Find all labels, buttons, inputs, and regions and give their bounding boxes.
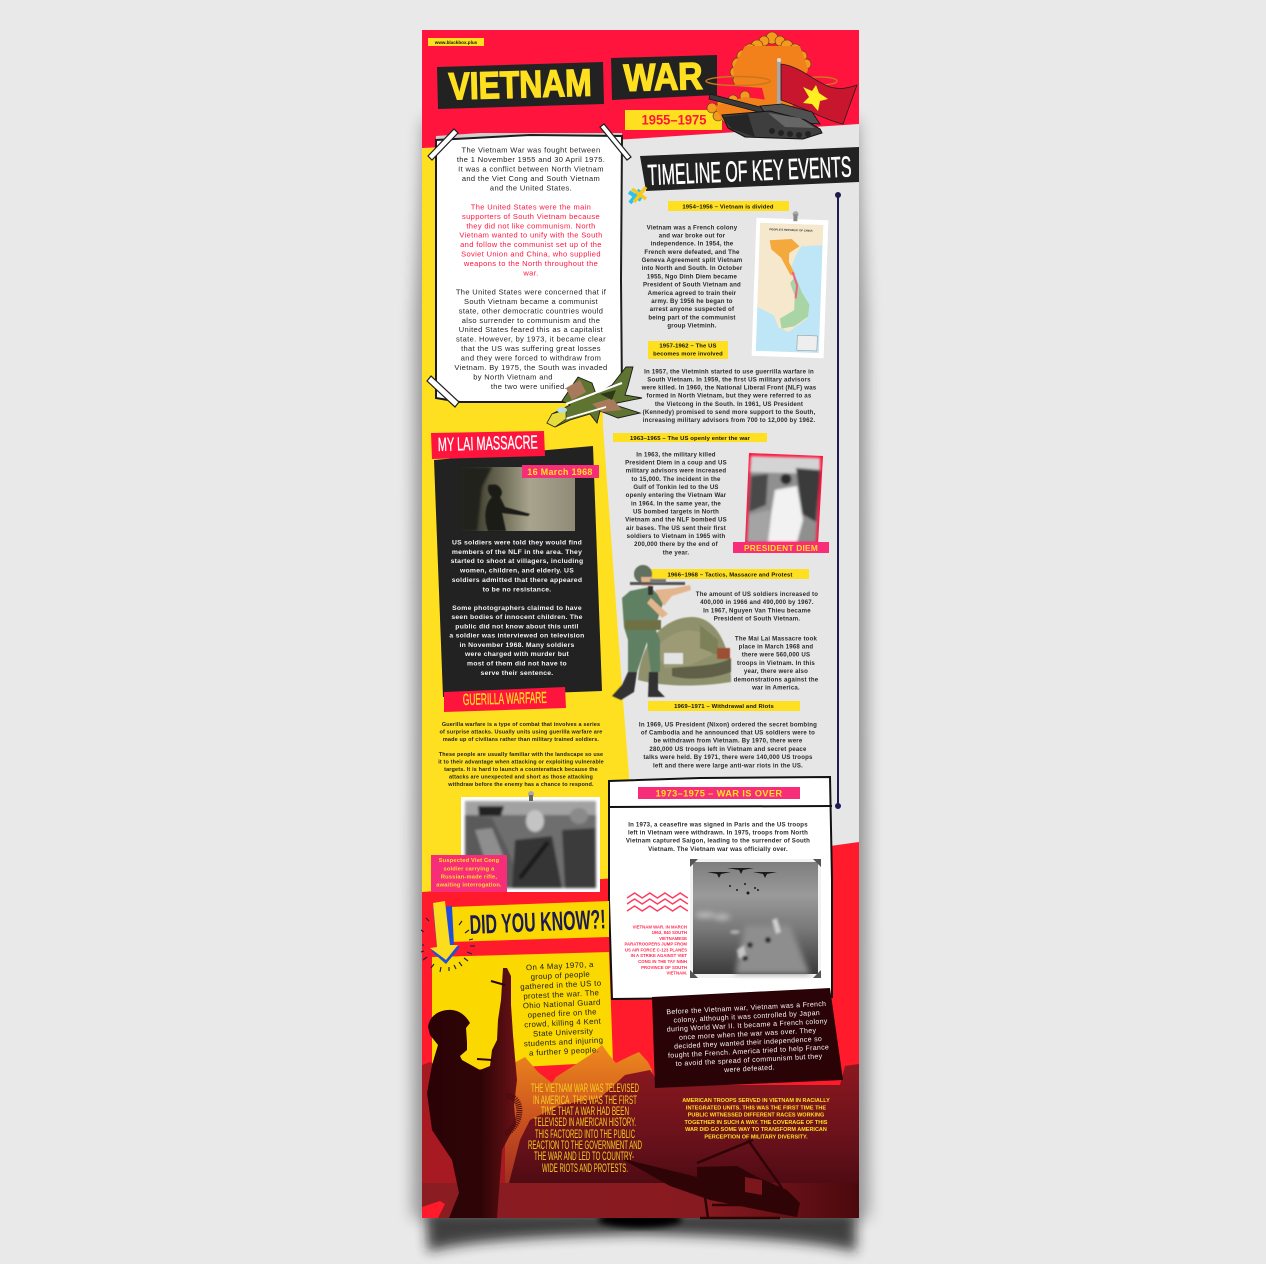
text: started to shoot at villagers, including — [451, 558, 583, 565]
guerilla warfare text: of surprise attacks. Usually units using guerilla warfare are — [440, 730, 602, 736]
guerilla warfare text: targets. It is hard to launch a counterattack because the — [444, 767, 598, 773]
event text 1969-1971: left and there were large anti-war riots in the US. — [653, 762, 803, 769]
intro red text: and follow the communist set up of the — [460, 240, 602, 249]
event text 1954-1956: independence. In 1954, the — [651, 241, 734, 248]
panel: Did you know body — [432, 952, 613, 1072]
event text 1954-1956: President of South Vietnam and — [643, 282, 741, 289]
tape top right — [600, 124, 631, 160]
event text 1966-1968: In 1967, Nguyen Van Thieu became — [703, 607, 811, 614]
timeline heading: TIMELINE OF KEY EVENTS — [647, 151, 852, 192]
text: a soldier was interviewed on television — [449, 633, 585, 640]
panel: My Lai Massacre — [431, 431, 602, 697]
intro text: It was a conflict between North Vietnam — [458, 164, 604, 174]
event text 1963-1965: Gulf of Tonkin led to the US — [633, 484, 719, 491]
intro red text: war. — [522, 268, 539, 278]
heading — [431, 431, 545, 459]
text: public did not know about this until — [455, 623, 579, 630]
did you know text: a further 9 people. — [529, 1045, 599, 1058]
timeline axis — [835, 192, 841, 809]
photo: paratroopers — [690, 859, 821, 978]
event heading 1957-1962 — [648, 341, 728, 359]
text: Some photographers claimed to have — [452, 605, 582, 612]
caption: Viet Cong soldier — [431, 855, 507, 892]
event text 1954-1956: arrest anyone suspected of — [650, 306, 735, 313]
tape bottom left — [427, 376, 459, 407]
photo caption: VIETNAMESE — [659, 936, 687, 941]
flag — [781, 64, 857, 124]
text: in November 1968. Many soldiers — [459, 642, 575, 649]
photo caption: US AIR FORCE C-123 PLANES — [625, 947, 687, 952]
text: were charged with murder but — [464, 651, 570, 658]
event text 1954-1956: 1955, Ngo Dinh Diem became — [647, 273, 738, 280]
event text 1969-1971: In 1969, US President (Nixon) ordered the secret bombing — [639, 721, 817, 728]
event text 1954-1956: group Vietminh. — [667, 323, 717, 330]
illustration: US soldier — [612, 565, 691, 700]
timeline heading — [640, 147, 859, 192]
text: serve their sentence. — [481, 670, 553, 677]
dark note: French colony: decided they wanted their independence so — [674, 1036, 822, 1051]
photo: President Diem — [745, 453, 823, 544]
panel: Guerilla Warfare heading: GUERILLA WARFARE — [463, 690, 547, 709]
orange mountains — [505, 1045, 660, 1218]
date tag: 16 March 1968 — [527, 467, 593, 477]
intro closing text: state, other democratic countries would — [459, 306, 603, 316]
flag star — [803, 85, 828, 111]
event text 1957-1962: increasing military advisors from 700 to 12,000 by 1962. — [643, 417, 815, 424]
intro closing text: Vietnam. By 1975, the South was invaded — [454, 363, 608, 372]
event heading 1966-1968 — [650, 569, 809, 579]
event text 1969-1971: be withdrawn from Vietnam. By 1970, there were — [654, 738, 803, 745]
heading: 1973–1975 – WAR IS OVER — [656, 788, 782, 798]
page drop shadow — [413, 120, 868, 1252]
event text 1963-1965: 200,000 there by the end of — [634, 541, 719, 548]
panel background — [434, 446, 602, 697]
foreground ground — [422, 1183, 859, 1218]
text: to be no resistance. — [483, 586, 551, 594]
event heading 1957-1962: becomes more involved — [653, 352, 723, 358]
icon: down arrow with burst — [421, 901, 475, 972]
intro red text: they did not like communism. North — [466, 222, 596, 230]
event text 1963-1965: In 1963, the military killed — [636, 451, 716, 458]
tape top left — [428, 129, 458, 160]
photo: soldier silhouette — [462, 467, 575, 531]
event text 1957-1962: (Kennedy) promised to send more support to the South, — [643, 409, 815, 416]
event text 1957-1962: South Vietnam. In 1959, the first US military advisors — [647, 376, 811, 384]
header red band — [422, 30, 859, 157]
label: President Diem: PRESIDENT DIEM — [744, 543, 818, 553]
event text 1954-1956: being part of the communist — [648, 314, 736, 321]
event text 1966-1968: year, there were also — [744, 668, 808, 675]
note: televised war: TIME THAT A WAR HAD BEEN — [541, 1104, 629, 1118]
did you know text: crowd, killing 4 Kent — [524, 1017, 602, 1029]
event text 1957-1962: formed in North Vietnam, but they were referred to as — [647, 393, 812, 400]
event text 1966-1968: President of South Vietnam. — [714, 616, 800, 623]
dark note: French colony — [652, 988, 843, 1088]
guerilla warfare text: Guerilla warfare is a type of combat that involves a series — [442, 722, 600, 728]
timeline grey panel — [600, 124, 859, 878]
event text 1963-1965: Vietnam and the NLF bombed US — [625, 517, 727, 524]
title: Vietnam: VIETNAM — [448, 63, 592, 108]
note: racially integrated units: AMERICAN TROOPS SERVED IN VIETNAM IN RACIALLY — [682, 1098, 830, 1104]
note: televised war: THIS FACTORED INTO THE PUBLIC — [535, 1127, 635, 1141]
event text 1954-1956: into North and South. In October — [642, 265, 743, 272]
note: televised war: WIDE RIOTS AND PROTESTS. — [542, 1161, 628, 1175]
dark note: French colony: were defeated. — [723, 1065, 775, 1074]
illustration: explosion, flag and tank — [706, 32, 857, 139]
event text 1969-1971: of Cambodia and he announced that US soldiers were to — [641, 730, 815, 736]
event text 1966-1968: war in America. — [751, 684, 800, 692]
note: televised war — [528, 1081, 642, 1175]
photo caption: VIETNAM. — [666, 970, 687, 976]
note: racially integrated units: INTEGRATED UNITS. THIS WAS THE FIRST TIME THE — [686, 1105, 826, 1111]
did you know text: gathered in the US to — [520, 979, 602, 992]
event heading 1954-1956 — [668, 201, 789, 211]
tank — [709, 94, 822, 139]
intro closing text: by North Vietnam and — [473, 372, 553, 382]
helicopter silhouette — [620, 1140, 800, 1218]
event text 1966-1968: The amount of US soldiers increased to — [696, 591, 818, 598]
intro closing text: that the US was suffering great losses — [461, 344, 601, 353]
event text 1969-1971: 280,000 US troops left in Vietnam and secret peace — [649, 746, 807, 753]
event text 1966-1968: demonstrations against the — [734, 676, 819, 683]
intro text: and the United States. — [490, 184, 572, 192]
flag pole — [777, 60, 781, 106]
intro note — [427, 124, 631, 407]
explosion cloud — [706, 32, 837, 123]
photo caption: CONG IN THE TAY NINH — [638, 959, 687, 964]
panel box — [609, 777, 832, 999]
illustration: helmet — [638, 617, 731, 686]
event text 1966-1968: there were 560,000 US — [742, 652, 810, 659]
date bar: 1955–1975 — [642, 112, 707, 128]
panel: Did you know heading — [450, 901, 609, 942]
event text 1954-1956: army. By 1956 he began to — [651, 298, 733, 305]
caption: Viet Cong soldier: soldier carrying a — [443, 867, 495, 873]
event text 1966-1968: troops in Vietnam. In this — [737, 660, 815, 667]
note: televised war: THE VIETNAM WAR WAS TELEVISED — [531, 1081, 639, 1095]
event text 1954-1956: America agreed to train their — [648, 290, 737, 297]
event text 1963-1965: military advisors were increased — [626, 468, 726, 475]
text: US soldiers were told they would find — [452, 540, 582, 546]
note: racially integrated units: TOGETHER IN SUCH A WAY. THE COVERAGE OF THIS — [685, 1120, 828, 1126]
text: left in Vietnam were withdrawn. In 1975, troops from North — [628, 829, 808, 836]
site tag: www.blackbox.plus — [434, 40, 478, 45]
panel: Did you know heading: DID YOU KNOW?! — [469, 904, 606, 940]
dark note: French colony: to avoid the spread of communism but they — [676, 1053, 823, 1068]
photo caption: VIETNAM WAR. IN MARCH — [633, 924, 687, 930]
caption: Viet Cong soldier: awaiting interrogation. — [436, 883, 502, 889]
note: televised war: THE WAR AND LED TO COUNTRY- — [534, 1149, 634, 1163]
intro closing text: and they were forced to withdraw from — [461, 354, 601, 362]
event text 1957-1962: In 1957, the Vietminh started to use guerrilla warfare in — [644, 368, 814, 375]
event text 1966-1968: 400,000 in 1966 and 490,000 by 1967. — [700, 599, 814, 606]
back sheet — [436, 133, 622, 145]
text: soldiers admitted that there appeared — [452, 577, 582, 584]
photo caption: 1963, 840 SOUTH — [652, 930, 687, 935]
note: televised war: IN AMERICA. THIS WAS THE FIRST — [533, 1093, 637, 1107]
did you know text: Ohio National Guard — [523, 998, 601, 1010]
text: women, children, and elderly. US — [459, 567, 574, 574]
text: Vietnam. The Vietnam war was officially over. — [648, 846, 788, 853]
note: televised war: REACTION TO THE GOVERNMENT AND — [528, 1138, 642, 1152]
event heading 1963-1965 — [613, 433, 767, 442]
event heading 1963-1965: 1963–1965 – The US openly enter the war — [630, 436, 751, 442]
note: racially integrated units: WAR DID GO SOME WAY TO TRANSFORM AMERICAN — [685, 1127, 827, 1133]
guerilla warfare text: These people are usually familiar with the landscape so use — [439, 752, 603, 758]
event text 1963-1965: soldiers to Vietnam in 1965 with — [627, 533, 725, 540]
dark note: French colony: colony, although it was controlled by Japan — [673, 1010, 820, 1025]
intro closing text: state. However, by 1973, it became clear — [456, 334, 606, 344]
intro closing text: the two were unified. — [491, 382, 567, 391]
intro red text: supporters of South Vietnam because — [462, 212, 600, 221]
photo: Viet Cong prisoner — [461, 791, 600, 892]
event heading 1969-1971 — [648, 701, 800, 711]
event text 1963-1965: the year. — [663, 549, 689, 556]
intro text: and the Viet Cong and South Vietnam — [462, 174, 600, 183]
date bar — [625, 110, 722, 130]
decoration: zigzag lines — [627, 893, 688, 911]
intro red text: Vietnam wanted to unify with the South — [459, 230, 603, 240]
dark note: French colony: Before the Vietnam war, Vietnam was a French — [666, 1001, 826, 1016]
intro closing text: South Vietnam became a communist — [464, 297, 599, 306]
intro text: the 1 November 1955 and 30 April 1975. — [457, 155, 605, 164]
event text 1963-1965: to 15,000. The incident in the — [631, 476, 721, 483]
dark hills left — [422, 1062, 505, 1218]
event text 1954-1956: and war broke out for — [659, 233, 726, 240]
panel: Guerilla Warfare heading — [444, 687, 566, 712]
dark note: French colony: once more when the war was over. They — [679, 1028, 817, 1042]
landscape silhouette — [422, 1045, 859, 1218]
silhouette: soldier with rifle — [427, 968, 519, 1218]
event text 1963-1965: in 1964. In the same year, the — [631, 500, 721, 507]
dark note: French colony: during World War II. It became a French colony — [667, 1018, 828, 1034]
title: War: WAR — [623, 56, 703, 100]
did you know text: group of people — [530, 970, 590, 981]
event heading 1957-1962: 1957-1962 – The US — [659, 344, 717, 350]
intro closing text: The United States were concerned that if — [456, 288, 607, 296]
icon: cross mark — [629, 187, 646, 203]
event text 1957-1962: the Vietcong in the South. In 1961, US President — [655, 401, 803, 408]
heading: MY LAI MASSACRE — [438, 432, 538, 456]
photo caption: IN A STRIKE AGAINST VIET — [631, 953, 687, 958]
did you know text: protest the war. The — [523, 988, 599, 1001]
map of Vietnam: PEOPLE'S REPUBLIC OF CHINA — [769, 227, 813, 233]
caption: Viet Cong soldier: Suspected Viet Cong — [439, 858, 500, 864]
note: racially integrated units: PERCEPTION OF MILITARY DIVERSITY. — [704, 1134, 808, 1140]
note: racially integrated units: PUBLIC WITNESSED DIFFERENT RACES WORKING — [688, 1112, 824, 1118]
event text 1966-1968: The Mai Lai Massacre took — [735, 635, 818, 642]
event text 1954-1956: French were defeated, and The — [644, 249, 740, 256]
text: most of them did not have to — [467, 660, 567, 668]
dark note: French colony: fought the French. America tried to help France — [668, 1044, 829, 1060]
text: In 1973, a ceasefire was signed in Paris and the US troops — [628, 821, 808, 828]
caption: Viet Cong soldier: Russian-made rifle, — [441, 875, 497, 881]
photo caption: PROVINCE OF SOUTH — [641, 965, 687, 970]
heading — [638, 787, 800, 799]
intro text: The Vietnam War was fought between — [462, 146, 600, 155]
event text 1963-1965: openly entering the Vietnam War — [626, 492, 727, 499]
guerilla warfare text: made up of civilians rather than military trained soldiers. — [443, 737, 599, 743]
poster background red — [422, 30, 859, 1218]
text: Vietnam captured Saigon, leading to the surrender of South — [626, 838, 810, 844]
did you know text: students and injuring — [524, 1036, 604, 1048]
did you know text: opened fire on the — [527, 1007, 597, 1020]
text: members of the NLF in the area. They — [452, 549, 582, 556]
event heading 1969-1971: 1969–1971 – Withdrawal and Riots — [674, 704, 774, 710]
intro closing text: United States feared this as a capitalist — [459, 325, 604, 334]
date tag — [522, 465, 599, 478]
illustration: fighter jet — [547, 367, 642, 427]
intro red text: Soviet Union and China, who supplied — [461, 250, 601, 258]
event text 1957-1962: were killed. In 1960, the National Liberal Front (NLF) was — [641, 385, 817, 392]
intro closing text: also surrender to communism and the — [462, 316, 600, 325]
event text 1969-1971: talks were held. By 1971, there were 140,000 US troops — [643, 754, 813, 761]
intro red text: weapons to the North throughout the — [463, 259, 598, 268]
panel: War is over — [609, 777, 832, 999]
did you know text: State University — [533, 1027, 594, 1038]
guerilla warfare text: withdraw before the enemy has a chance to respond. — [447, 782, 594, 788]
event text 1954-1956: Geneva Agreement split Vietnam — [642, 257, 743, 264]
photo caption: PARATROOPERS JUMP FROM — [624, 942, 687, 947]
note paper — [436, 135, 622, 402]
event text 1954-1956: Vietnam was a French colony — [647, 224, 738, 231]
text: seen bodies of innocent children. The — [451, 614, 583, 621]
did you know text: On 4 May 1970, a — [526, 960, 594, 972]
event text 1963-1965: US bombed targets in North — [633, 508, 719, 516]
dark red tree line — [500, 1064, 859, 1218]
guerilla warfare text: attacks are unexpected and short as those attacking — [449, 774, 593, 780]
guerilla warfare text: it to their advantage when attacking or exploiting vulnerable — [438, 760, 604, 766]
note: televised war: TELEVISED IN AMERICAN HISTORY. — [534, 1115, 636, 1129]
event text 1963-1965: President Diem in a coup and US — [625, 460, 727, 466]
event heading 1966-1968: 1966–1968 – Tactics, Massacre and Protest — [668, 572, 792, 578]
event text 1966-1968: place in March 1968 and — [739, 644, 813, 650]
site tag — [428, 38, 484, 46]
intro red text: The United States were the main — [471, 202, 591, 212]
event heading 1954-1956: 1954–1956 – Vietnam is divided — [682, 204, 774, 210]
event text 1963-1965: air bases. The US sent their first — [626, 525, 726, 532]
yellow left panel — [422, 140, 630, 892]
map of Vietnam — [752, 210, 829, 358]
